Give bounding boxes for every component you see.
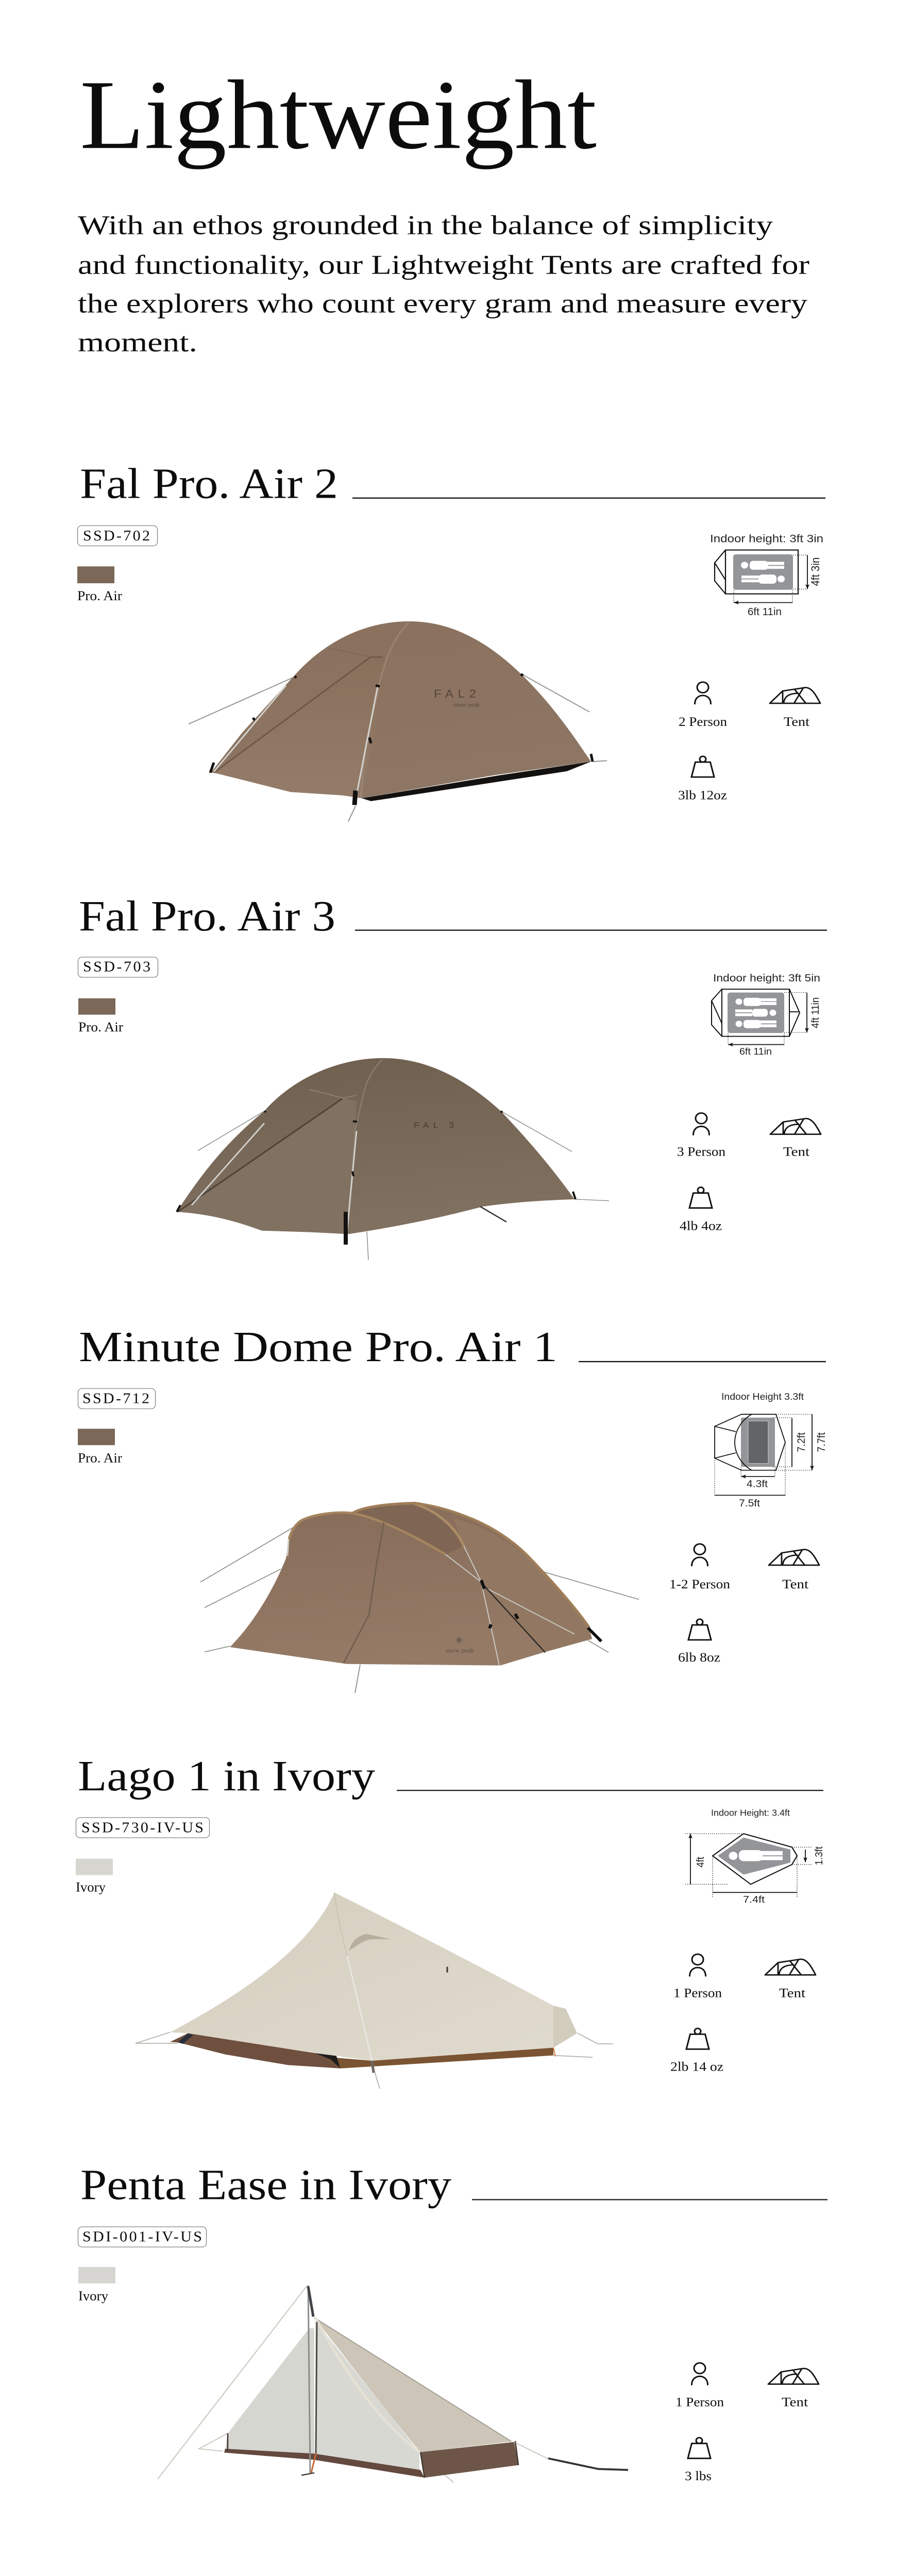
weight label: 2lb 14 oz [670,2059,723,2074]
icon: weight [689,1187,712,1208]
type label: Tent [783,1144,810,1159]
floor plan diagram: 7.7ft [816,1432,827,1452]
tent photo: Fal Pro. Air 2: snow peak [453,702,480,708]
icon: person [695,682,711,704]
floor plan diagram: 1.3ft [813,1846,825,1865]
capacity label: 1 Person [675,2395,724,2409]
floor plan diagram: 7.4ft [743,1894,765,1905]
intro paragraph: With an ethos grounded in the balance of simplicity [78,210,773,240]
type label: Tent [782,1577,809,1591]
colour label: Ivory [78,2289,108,2303]
colour swatch [77,566,114,583]
icon: tent [769,1550,819,1565]
intro paragraph: and functionality, our Lightweight Tents are crafted for [78,250,809,280]
heading: Fal Pro. Air 3 [79,891,335,940]
heading rule [355,929,827,931]
floor plan diagram: 4.3ft [747,1479,768,1489]
tent photo: Fal Pro. Air 2: FAL2 [434,687,476,700]
heading rule [352,498,825,499]
intro paragraph: moment. [78,328,197,358]
type label: Tent [782,2395,808,2409]
tent photo: Lago 1 in Ivory [136,1892,613,2089]
model tag: SSD-702 [83,528,150,544]
floor plan diagram: Indoor height: 3ft 5in [713,972,820,984]
panel: Minute Dome Pro. Air 1 [78,1323,827,1693]
colour swatch [78,2267,115,2283]
tent photo: Fal Pro. Air 2 [189,621,607,821]
tent photo: Fal Pro. Air 3: FAL 3 [414,1121,454,1130]
tent photo: Minute Dome Pro. Air 1: snow peak [446,1647,474,1654]
panel: Lago 1 in Ivory [76,1752,825,2089]
colour label: Pro. Air [78,1451,122,1465]
heading rule [472,2199,827,2200]
tent photo: Minute Dome Pro. Air 1 [200,1503,639,1693]
colour label: Pro. Air [77,588,122,603]
model tag: SSD-712 [82,1391,149,1406]
floor plan diagram: 6ft 11in [739,1046,772,1057]
heading: Fal Pro. Air 2 [80,459,338,507]
heading rule [579,1361,826,1362]
capacity label: 2 Person [679,715,727,729]
title: Lightweight [80,60,597,170]
model tag [78,1388,156,1409]
capacity label: 3 Person [677,1144,725,1159]
weight label: 6lb 8oz [678,1650,720,1665]
heading: Lago 1 in Ivory [78,1752,375,1800]
intro paragraph [78,210,809,358]
floor plan diagram: 7.2ft [796,1432,807,1452]
type label: Tent [779,1986,806,2000]
model tag: SSD-703 [83,959,150,975]
icon: person [694,1113,709,1134]
weight label: 3lb 12oz [678,788,727,802]
model tag [78,957,158,977]
model tag: SDI-001-IV-US [82,2229,202,2245]
colour label: Pro. Air [78,1020,123,1035]
icon: person [691,2363,708,2385]
tent photo: Fal Pro. Air 3 [177,1058,609,1260]
icon: tent [765,1959,816,1975]
colour swatch [76,1859,113,1875]
icon: person [691,1544,708,1566]
floor plan diagram [712,972,821,1057]
intro paragraph: the explorers who count every gram and measure every [78,289,807,318]
colour swatch [78,998,115,1014]
floor plan diagram: 6ft 11in [748,606,782,618]
icon: tent [770,1118,821,1134]
tent photo: Penta Ease in Ivory [158,2285,628,2482]
icon: weight [691,756,714,777]
icon: tent [768,2368,819,2384]
floor plan diagram [715,1392,827,1509]
floor plan diagram: 7.5ft [739,1498,760,1509]
model tag: SSD-730-IV-US [81,1820,204,1836]
model tag [77,526,158,546]
type label: Tent [784,715,810,729]
floor plan diagram: Indoor Height 3.3ft [721,1392,804,1402]
icon: person [689,1954,706,1976]
floor plan diagram [710,532,823,618]
panel: Penta Ease in Ivory [78,2160,827,2483]
capacity label: 1-2 Person [669,1577,730,1591]
floor plan diagram: Indoor Height: 3.4ft [711,1808,790,1818]
weight label: 3 lbs [685,2469,712,2483]
floor plan diagram: Indoor height: 3ft 3in [710,532,823,545]
heading: Minute Dome Pro. Air 1 [79,1323,558,1371]
colour label: Ivory [76,1879,106,1894]
icon: weight [688,1619,711,1640]
heading: Penta Ease in Ivory [80,2160,451,2209]
panel: Fal Pro. Air 2 [77,459,825,821]
colour swatch [78,1429,115,1445]
weight label: 4lb 4oz [680,1219,722,1233]
floor plan diagram: 4ft 3in [809,557,822,586]
capacity label: 1 Person [673,1986,722,2000]
floor plan diagram: 4ft [695,1856,706,1868]
icon: tent [770,688,820,703]
floor plan diagram: 4ft 11in [809,997,821,1028]
icon: weight [686,2028,709,2049]
floor plan diagram [685,1808,825,1905]
panel: Fal Pro. Air 3 [78,891,827,1260]
icon: weight [688,2437,711,2459]
heading rule [397,1790,823,1791]
